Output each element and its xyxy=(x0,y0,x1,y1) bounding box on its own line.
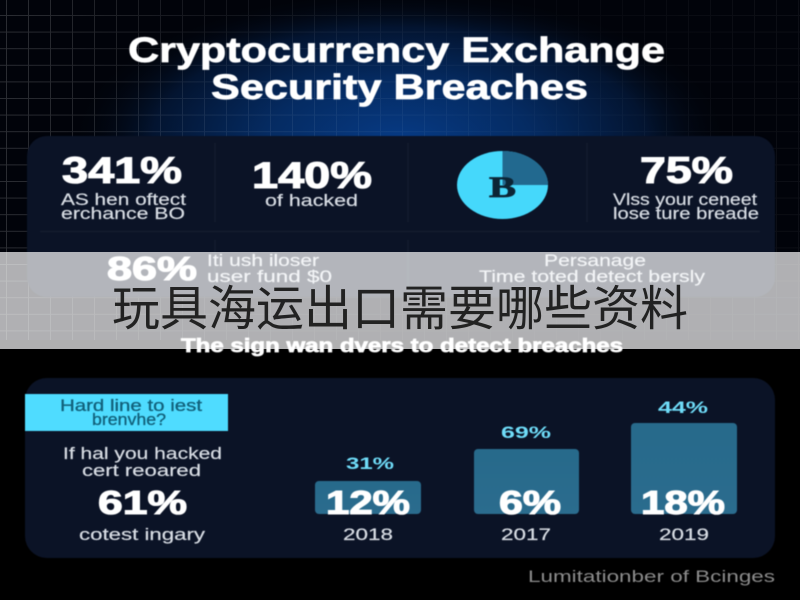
bar: 2018 xyxy=(315,454,421,544)
footer source note: Lumitationber of Bcinges xyxy=(528,567,775,586)
text block: 61% stat: 61% xyxy=(98,484,187,521)
stat: 86%: user fund $0 xyxy=(207,267,332,286)
title xyxy=(128,31,665,107)
bar chart xyxy=(315,398,737,544)
bar: 2018: 12% xyxy=(326,484,410,521)
text block: 61% stat: If hal you hacked xyxy=(63,444,222,463)
stat: 140%: of hacked xyxy=(265,191,358,210)
panel: detection chart xyxy=(25,378,775,558)
stat: 75%: lose ture breade xyxy=(613,204,759,223)
stat: 75%: 75% xyxy=(640,150,733,191)
overlay banner: 玩具海运出口需要哪些资料 xyxy=(112,283,688,336)
stat: percentage label xyxy=(479,251,706,286)
bar: 2019: 18% xyxy=(641,484,725,521)
stat: 86%: Iti ush iloser xyxy=(207,251,319,270)
callout: cyan label: Hard line to iest xyxy=(60,397,203,415)
pie chart with bitcoin icon xyxy=(457,151,548,219)
stat: 140%: 140% xyxy=(252,155,372,196)
panel: breach statistics xyxy=(27,136,775,297)
stat: 86%: 86% xyxy=(107,250,197,287)
bar: 2018: 2018 xyxy=(343,525,393,544)
bar: 2019: 44% xyxy=(658,398,708,417)
stat: 75%: Vlss your ceneet xyxy=(613,190,757,209)
stat: 341%: erchance BO xyxy=(61,204,185,223)
stat: 86% xyxy=(107,250,332,287)
pie chart with bitcoin icon: B xyxy=(489,171,516,204)
text block: 61% stat: cert reoared xyxy=(82,461,201,480)
bar: 2017: 2017 xyxy=(501,525,551,544)
text block: 61% stat: cotest ingary xyxy=(79,525,206,544)
overlay banner xyxy=(0,252,800,349)
callout: cyan label xyxy=(25,394,228,431)
bar: 2017: 69% xyxy=(501,423,551,442)
stat: 341%: 341% xyxy=(62,150,182,191)
title: Cryptocurrency Exchange xyxy=(128,31,665,70)
stat: 140% xyxy=(252,155,372,210)
stat: 75% xyxy=(613,150,759,223)
section heading: The sign wan dvers to detect breaches xyxy=(181,336,623,357)
text block: 61% stat xyxy=(63,444,222,544)
stat: percentage label: Time toted detect bersly xyxy=(479,267,706,286)
title: Security Breaches xyxy=(211,68,588,107)
bar: 2017: 6% xyxy=(499,484,561,521)
bar: 2017 xyxy=(474,423,579,544)
callout: cyan label: brenvhe? xyxy=(92,411,166,429)
stat: 341% xyxy=(61,150,186,223)
stat: 341%: AS hen oftect xyxy=(61,190,186,209)
bar: 2019: 2019 xyxy=(659,525,709,544)
stat: percentage label: Persanage xyxy=(544,251,646,270)
bar: 2019 xyxy=(631,398,737,544)
bar: 2018: 31% xyxy=(346,454,394,473)
